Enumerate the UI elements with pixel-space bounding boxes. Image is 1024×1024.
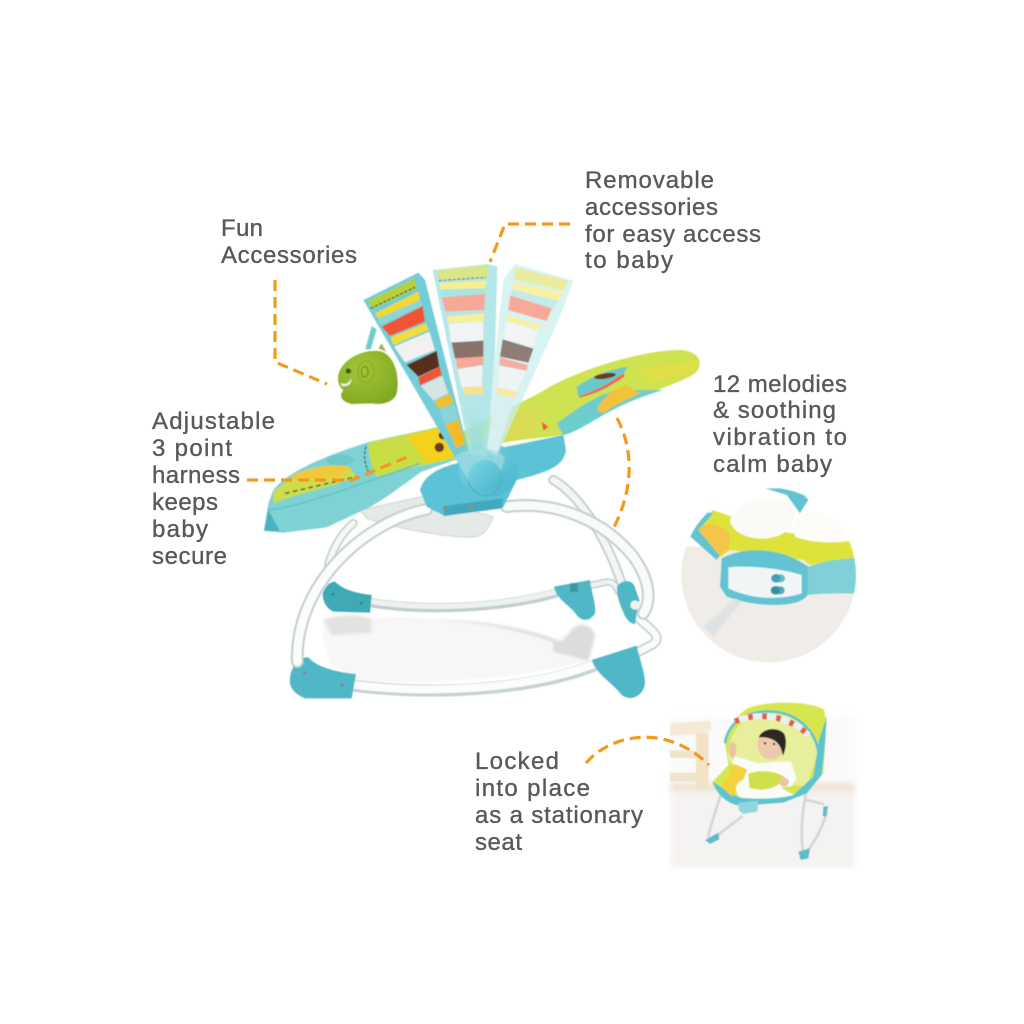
main product: seat and canopy fan — [264, 264, 700, 662]
label: stationary seat: seat — [475, 829, 522, 856]
label: fun accessories: Fun — [221, 215, 263, 242]
label: melodies and vibration: vibration to — [713, 424, 847, 451]
left canopy — [363, 273, 470, 463]
label: stationary seat: into place — [475, 775, 590, 802]
dashed leader: removable accessories — [490, 224, 570, 262]
yellow seat pattern — [722, 762, 753, 797]
rocker legs — [708, 790, 827, 853]
front frame arcs — [297, 506, 648, 662]
middle canopy — [433, 264, 497, 457]
label: adjustable harness — [152, 408, 275, 570]
rear and base tubes — [328, 480, 657, 691]
canopy arc — [725, 711, 818, 752]
inset: controls close-up circle — [680, 487, 857, 663]
label: adjustable harness: keeps — [152, 489, 218, 516]
label: removable accessories: to baby — [585, 247, 673, 274]
teal feet — [290, 580, 645, 698]
room background — [670, 717, 855, 868]
wooden shelf — [670, 721, 712, 788]
dashed leader: adjustable harness — [247, 455, 412, 480]
label: stationary seat: as a stationary — [475, 802, 643, 829]
label: melodies and vibration: & soothing — [713, 397, 836, 424]
label: adjustable harness: baby — [152, 516, 208, 543]
label: removable accessories: for easy access — [585, 221, 761, 248]
dashed leader: melodies — [612, 418, 629, 531]
rocker frame: rear tubes, feet and reflection — [290, 480, 657, 698]
label: removable accessories: accessories — [585, 194, 718, 221]
rocker feet — [705, 806, 828, 860]
seat back (head end) — [453, 350, 700, 450]
icon: elephant toy — [338, 326, 398, 404]
label: melodies and vibration: calm baby — [713, 451, 832, 478]
label: adjustable harness: 3 point — [152, 435, 232, 462]
label: adjustable harness: harness — [152, 462, 240, 489]
hub housing — [420, 435, 566, 516]
label: melodies and vibration: 12 melodies — [713, 371, 847, 398]
control box — [738, 801, 758, 814]
mesh under seat — [360, 497, 493, 537]
label: stationary seat: Locked — [475, 748, 559, 775]
floor reflection — [323, 615, 595, 682]
label: stationary seat — [475, 748, 643, 856]
hub knob — [455, 449, 505, 493]
label: removable accessories — [585, 167, 761, 274]
seat — [713, 703, 827, 805]
dashed leader: fun accessories — [275, 280, 327, 384]
baby — [729, 729, 797, 799]
label: fun accessories — [221, 215, 357, 269]
label: fun accessories: Accessories — [221, 242, 357, 269]
canopy interior — [728, 713, 817, 787]
right canopy — [485, 264, 573, 457]
inset: baby seated in rocker — [670, 703, 855, 868]
label: melodies and vibration — [713, 371, 847, 478]
seat bottom (foot end) — [264, 425, 460, 533]
label: removable accessories: Removable — [585, 167, 714, 194]
dashed leader: stationary seat — [586, 737, 709, 765]
seat trim — [713, 717, 827, 806]
label: adjustable harness: secure — [152, 543, 227, 570]
label: adjustable harness: Adjustable — [152, 408, 275, 435]
